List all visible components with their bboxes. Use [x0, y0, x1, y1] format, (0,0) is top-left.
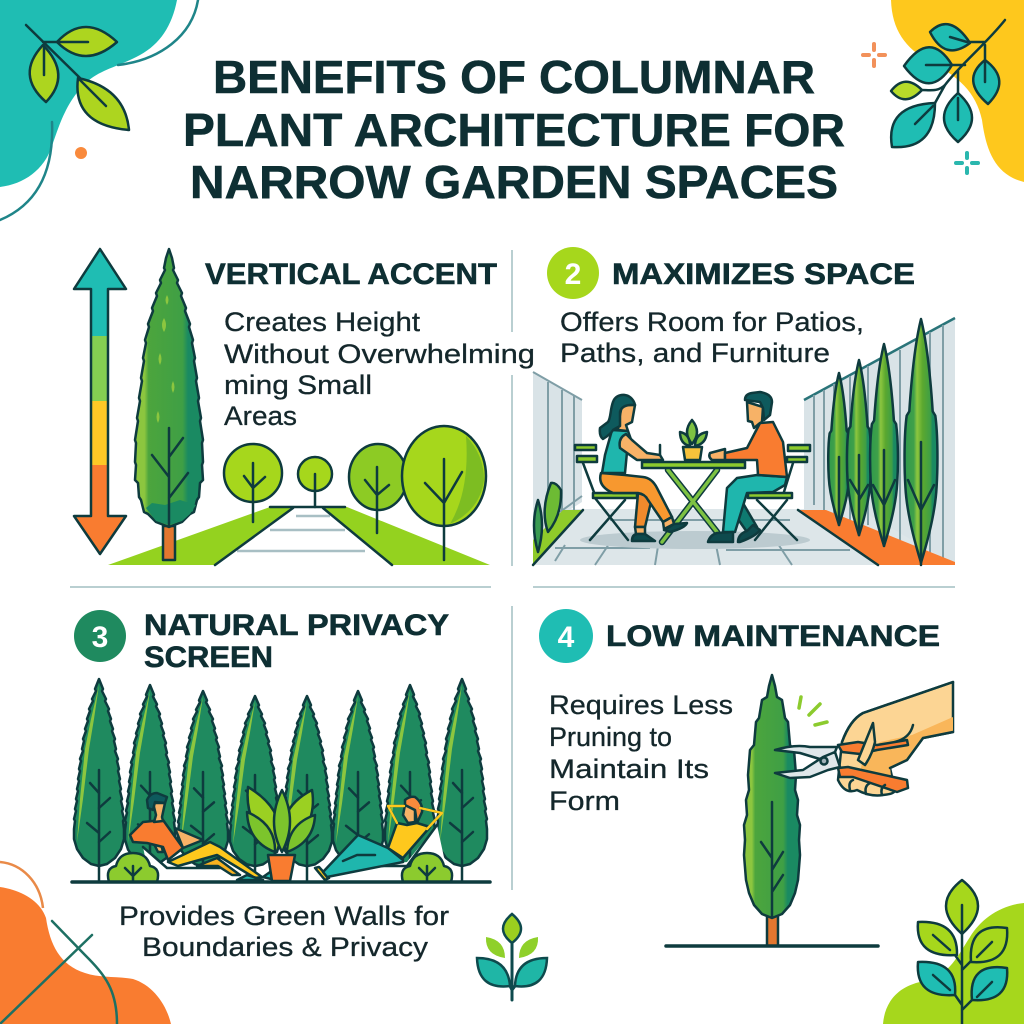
decoration: yellow corner blob with leaves [891, 0, 1024, 182]
decoration: lime corner blob with sprig [883, 880, 1024, 1024]
icon: reclining woman [315, 797, 442, 880]
text: natural privacy description [119, 901, 449, 962]
text: maximizes space description [560, 307, 864, 368]
text: vertical accent description [224, 307, 535, 431]
icon: pruned columnar tree [744, 675, 800, 946]
title: NARROW GARDEN SPACES [190, 156, 838, 208]
patio and fences [533, 318, 955, 565]
icon: orange sparkle [863, 44, 885, 66]
decoration: orange dot [75, 147, 87, 159]
badge: number 3: 3 [92, 621, 108, 654]
icon: row of columnar trees [74, 679, 487, 882]
heading: natural privacy screen: SCREEN [144, 641, 273, 674]
badge: number 3 [74, 610, 126, 662]
icon: columnar trees row [828, 319, 937, 565]
panel dividers [70, 250, 955, 890]
badge: number 4: 4 [558, 621, 575, 654]
text: maximizes space description: Paths, and Furniture [560, 338, 830, 368]
heading: vertical accent: VERTICAL ACCENT [205, 258, 497, 291]
icon: hand with pruning shears [775, 682, 953, 795]
icon: teal sparkle [956, 153, 978, 173]
heading: natural privacy screen [144, 609, 449, 674]
decoration: teal corner blob with leaves [0, 0, 198, 220]
icon: round trees [224, 426, 486, 560]
icon: left chair [575, 445, 637, 540]
title: BENEFITS OF COLUMNAR [213, 51, 815, 103]
text: vertical accent description: Areas [224, 401, 297, 431]
text: vertical accent description: Without Overwhelming [224, 339, 535, 369]
heading: natural privacy screen: NATURAL PRIVACY [144, 609, 449, 642]
icon: lounge chairs [143, 825, 445, 881]
title: PLANT ARCHITECTURE FOR [183, 104, 845, 156]
title [183, 51, 845, 208]
decoration: orange corner blob [0, 862, 171, 1024]
icon: bottom centre sprig [477, 914, 547, 1000]
text: low maintenance description: Maintain Its [549, 754, 709, 784]
icon: right chair [748, 445, 810, 540]
icon: columnar tree [135, 249, 203, 560]
icon: potted plant [247, 787, 315, 881]
ground and path [108, 507, 490, 565]
icon: man seated [708, 392, 787, 542]
text: low maintenance description: Form [549, 786, 620, 816]
icon: reclining man [130, 793, 280, 880]
heading: low maintenance: LOW MAINTENANCE [606, 620, 940, 653]
text: natural privacy description: Provides Green Walls for [119, 901, 449, 931]
text: maximizes space description: Offers Room for Patios, [560, 307, 864, 337]
text: vertical accent description: ming Small [224, 370, 372, 400]
panel: vertical accent [74, 249, 535, 565]
icon: cut marks [799, 697, 827, 725]
panel: low maintenance [539, 609, 953, 946]
text: low maintenance description: Pruning to [549, 722, 672, 752]
badge: number 4 [539, 609, 593, 663]
heading: maximizes space: MAXIMIZES SPACE [612, 258, 915, 291]
badge: number 2 [547, 247, 599, 299]
icon: woman seated [600, 395, 687, 541]
text: low maintenance description [549, 690, 733, 816]
panel: natural privacy screen [72, 609, 490, 962]
ground line [72, 880, 490, 884]
text: natural privacy description: Boundaries & Privacy [142, 932, 429, 962]
panel: maximizes space [533, 247, 955, 565]
ground line [666, 944, 878, 948]
text: low maintenance description: Requires Less [549, 690, 733, 720]
text: vertical accent description: Creates Height [224, 307, 421, 337]
icon: small shrub [534, 483, 561, 552]
icon: height arrow [74, 249, 126, 554]
badge: number 2: 2 [565, 258, 581, 291]
icon: bushes [108, 853, 452, 882]
icon: bistro table with plant [642, 420, 745, 542]
